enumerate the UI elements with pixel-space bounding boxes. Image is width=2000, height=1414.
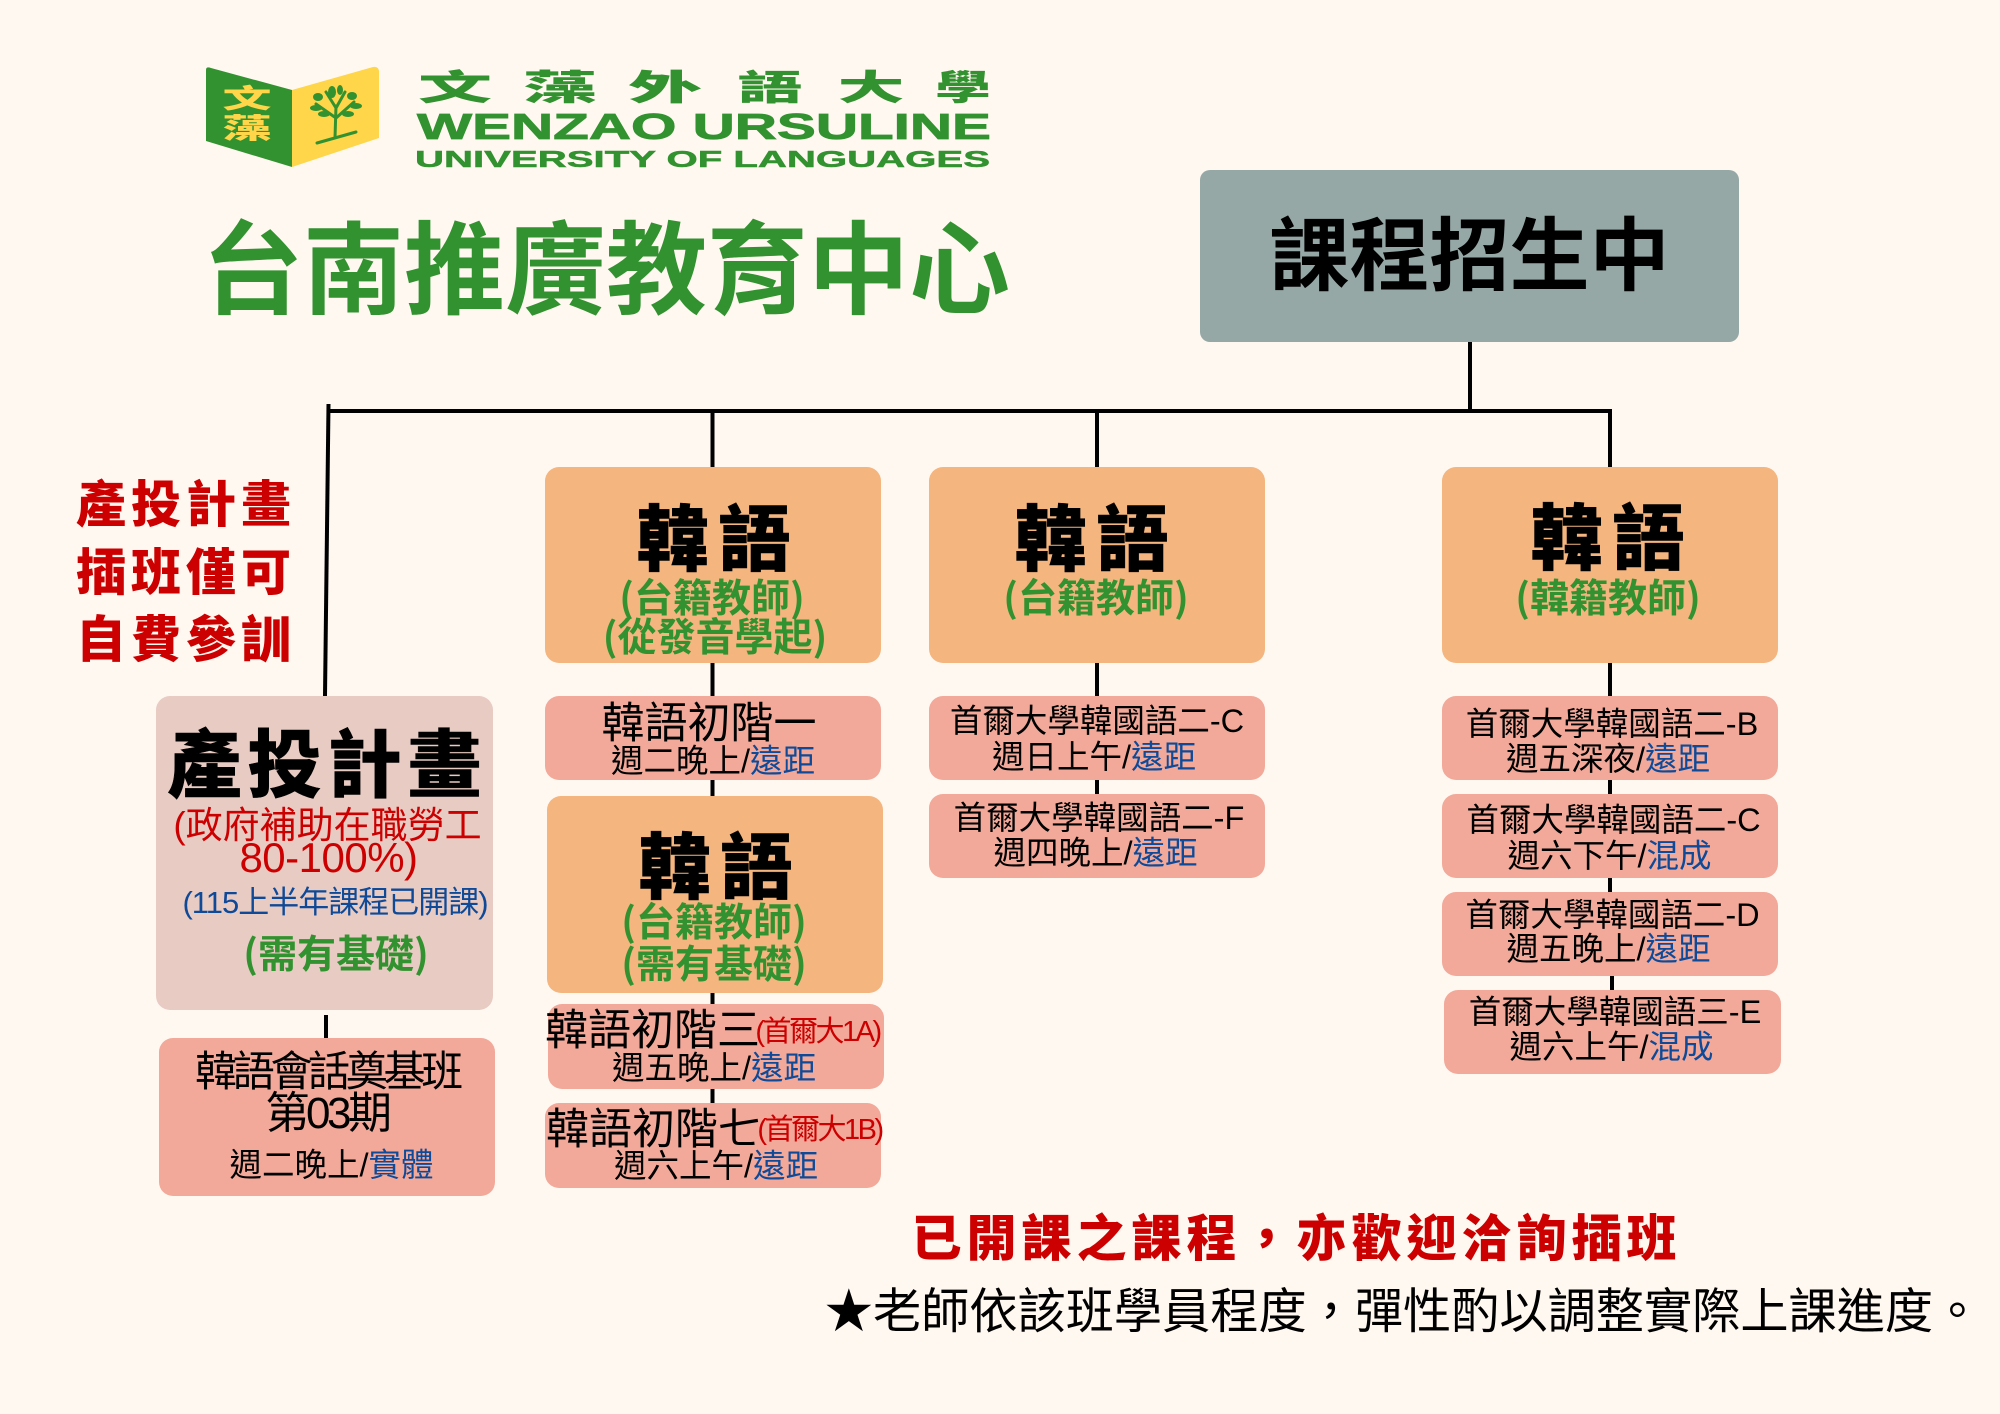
class term: 第03期	[266, 1089, 388, 1138]
class time: 週二晚上/實體	[229, 1147, 434, 1183]
class name: 韓語初階三	[545, 1006, 760, 1054]
university Chinese name: 藻	[523, 59, 597, 110]
icon: open book green page	[206, 67, 292, 167]
class time: 週五晚上/遠距	[612, 1050, 816, 1086]
university Chinese name: 學	[935, 60, 991, 111]
heading: 韓語	[638, 809, 802, 914]
class: Seoul 2-C	[929, 696, 1265, 780]
icon: tree	[310, 85, 362, 143]
class name: 首爾大學韓國語二-F	[954, 800, 1244, 836]
book characters	[223, 78, 272, 146]
note: teacher adjusts progress: ★老師依該班學員程度，彈性酌以調整實際上課進度。	[825, 1272, 1981, 1342]
panel: foundation class	[159, 1038, 495, 1196]
panel: enrolment banner	[1200, 170, 1739, 342]
university English name: WENZAO URSULINE	[417, 106, 991, 147]
class: Seoul 2-D	[1442, 892, 1778, 976]
banner text: 課程招生中	[1270, 192, 1670, 308]
heading: 韓語	[636, 481, 800, 586]
icon: open book yellow page	[292, 67, 379, 167]
book characters: 藻	[223, 106, 272, 146]
university Chinese name	[418, 59, 991, 111]
class: beginner 1	[545, 696, 881, 780]
class time: 週日上午/遠距	[992, 739, 1196, 775]
class name: 首爾大學韓國語二-C	[1466, 802, 1761, 838]
panel: column 3 header	[1442, 467, 1778, 663]
university Chinese name: 語	[738, 60, 802, 111]
class name: 首爾大學韓國語二-C	[950, 703, 1244, 739]
class name: 韓語初階一	[602, 700, 816, 748]
class name: 首爾大學韓國語二-D	[1465, 897, 1760, 933]
university English subtitle: UNIVERSITY OF LANGUAGES	[415, 146, 990, 172]
panel: column 1 header	[545, 467, 881, 663]
class time: 週六上午/混成	[1509, 1029, 1714, 1065]
class name: 首爾大學韓國語三-E	[1469, 994, 1761, 1030]
panel: column 1 second header	[547, 796, 883, 993]
side note: self-funded: 插班僅可	[76, 533, 296, 605]
level: (從發音學起)	[603, 606, 827, 662]
class: Seoul 2-F	[929, 794, 1265, 878]
class: beginner 3	[548, 1004, 884, 1089]
subsidy percentage: 80-100%)	[239, 834, 418, 881]
teacher: (台籍教師)	[1003, 568, 1189, 624]
teacher: (台籍教師)	[621, 892, 807, 948]
heading: 韓語	[1014, 481, 1178, 586]
requirement: (需有基礎)	[243, 924, 429, 980]
heading: 產投計畫	[168, 706, 488, 813]
class: Seoul 2-B	[1442, 696, 1778, 780]
class time: 週五深夜/遠距	[1506, 741, 1710, 777]
university Chinese name: 外	[628, 59, 702, 110]
callout: open classes welcome: 已開課之課程，亦歡迎洽詢插班	[912, 1199, 1682, 1271]
book characters: 文	[223, 78, 271, 116]
class time: 週五晚上/遠距	[1506, 931, 1711, 967]
side note: self-funded	[76, 465, 296, 672]
heading: 韓語	[1530, 480, 1694, 585]
side note: self-funded: 產投計畫	[76, 465, 296, 537]
class time: 週二晚上/遠距	[611, 743, 815, 779]
class note: (首爾大1B)	[757, 1114, 882, 1146]
title: 台南推廣教育中心	[202, 190, 1010, 336]
panel: subsidised programme	[156, 696, 493, 1010]
class time: 週六下午/混成	[1507, 838, 1712, 874]
side note: self-funded: 自費參訓	[76, 600, 296, 672]
term note: (115上半年課程已開課)	[182, 884, 488, 920]
class: beginner 7	[545, 1103, 881, 1188]
subsidy note: (政府補助在職勞工	[173, 804, 482, 846]
university Chinese name: 大	[838, 60, 904, 111]
class time: 週六上午/遠距	[614, 1148, 818, 1184]
class name: 韓語會話奠基班	[195, 1048, 459, 1095]
class name: 韓語初階七	[546, 1106, 761, 1154]
university Chinese name: 文	[418, 59, 492, 110]
class: Seoul 3-E	[1444, 990, 1781, 1074]
panel: column 2 header	[929, 467, 1265, 663]
logo: Wenzao Ursuline University of Languages	[206, 59, 991, 172]
class note: (首爾大1A)	[755, 1016, 880, 1048]
class time: 週四晚上/遠距	[993, 835, 1198, 871]
class: Seoul 2-C	[1442, 794, 1778, 878]
teacher: (台籍教師)	[619, 568, 805, 624]
level: (需有基礎)	[621, 934, 807, 990]
class name: 首爾大學韓國語二-B	[1466, 706, 1758, 742]
teacher: (韓籍教師)	[1515, 568, 1701, 624]
